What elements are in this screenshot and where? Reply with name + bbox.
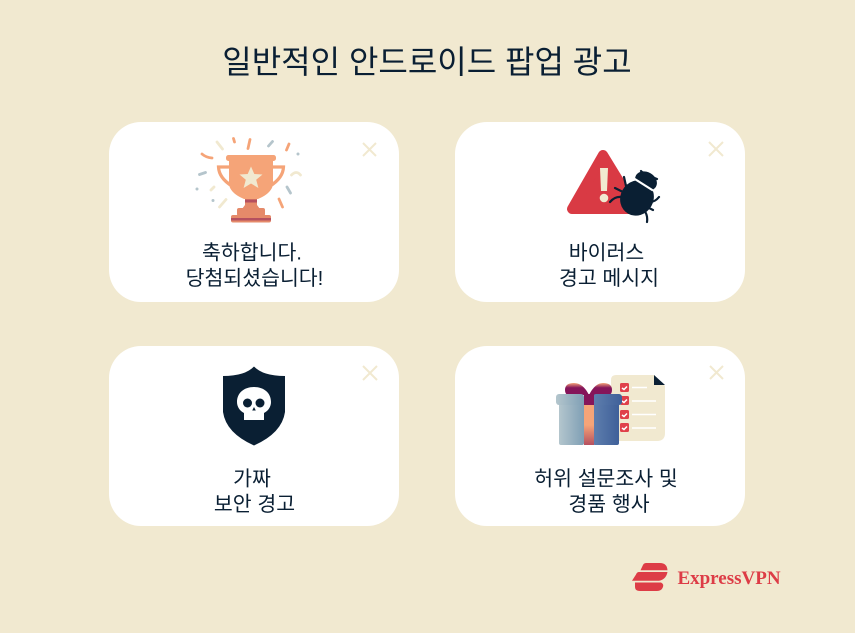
- label: 바이러스: [569, 242, 644, 264]
- close icon: [363, 366, 377, 380]
- close icon: [709, 142, 723, 156]
- label: 가짜: [233, 468, 271, 490]
- panel: fake security alert: [109, 346, 399, 526]
- title: 일반적인 안드로이드 팝업 광고: [222, 44, 632, 80]
- panel: congratulations: [109, 122, 399, 302]
- label: 허위 설문조사 및: [534, 468, 678, 490]
- label: 축하합니다.: [202, 242, 302, 264]
- logo: ExpressVPN: ExpressVPN: [677, 568, 781, 589]
- panel: virus warning: [455, 122, 745, 302]
- logo: ExpressVPN: [632, 563, 781, 591]
- label line 2: 보안 경고: [214, 493, 295, 516]
- label line 2: 경고 메시지: [559, 267, 659, 290]
- icon: gift and checklist: [556, 375, 665, 445]
- icon: shield with skull: [223, 366, 285, 446]
- label line 2: 당첨되셨습니다!: [186, 267, 323, 290]
- close icon: [710, 366, 723, 379]
- icon: trophy with confetti: [196, 138, 300, 222]
- panel: fake survey and giveaway: [455, 346, 745, 526]
- icon: warning triangle with bug: [572, 155, 660, 222]
- close icon: [363, 143, 376, 156]
- label line 2: 경품 행사: [568, 493, 650, 516]
